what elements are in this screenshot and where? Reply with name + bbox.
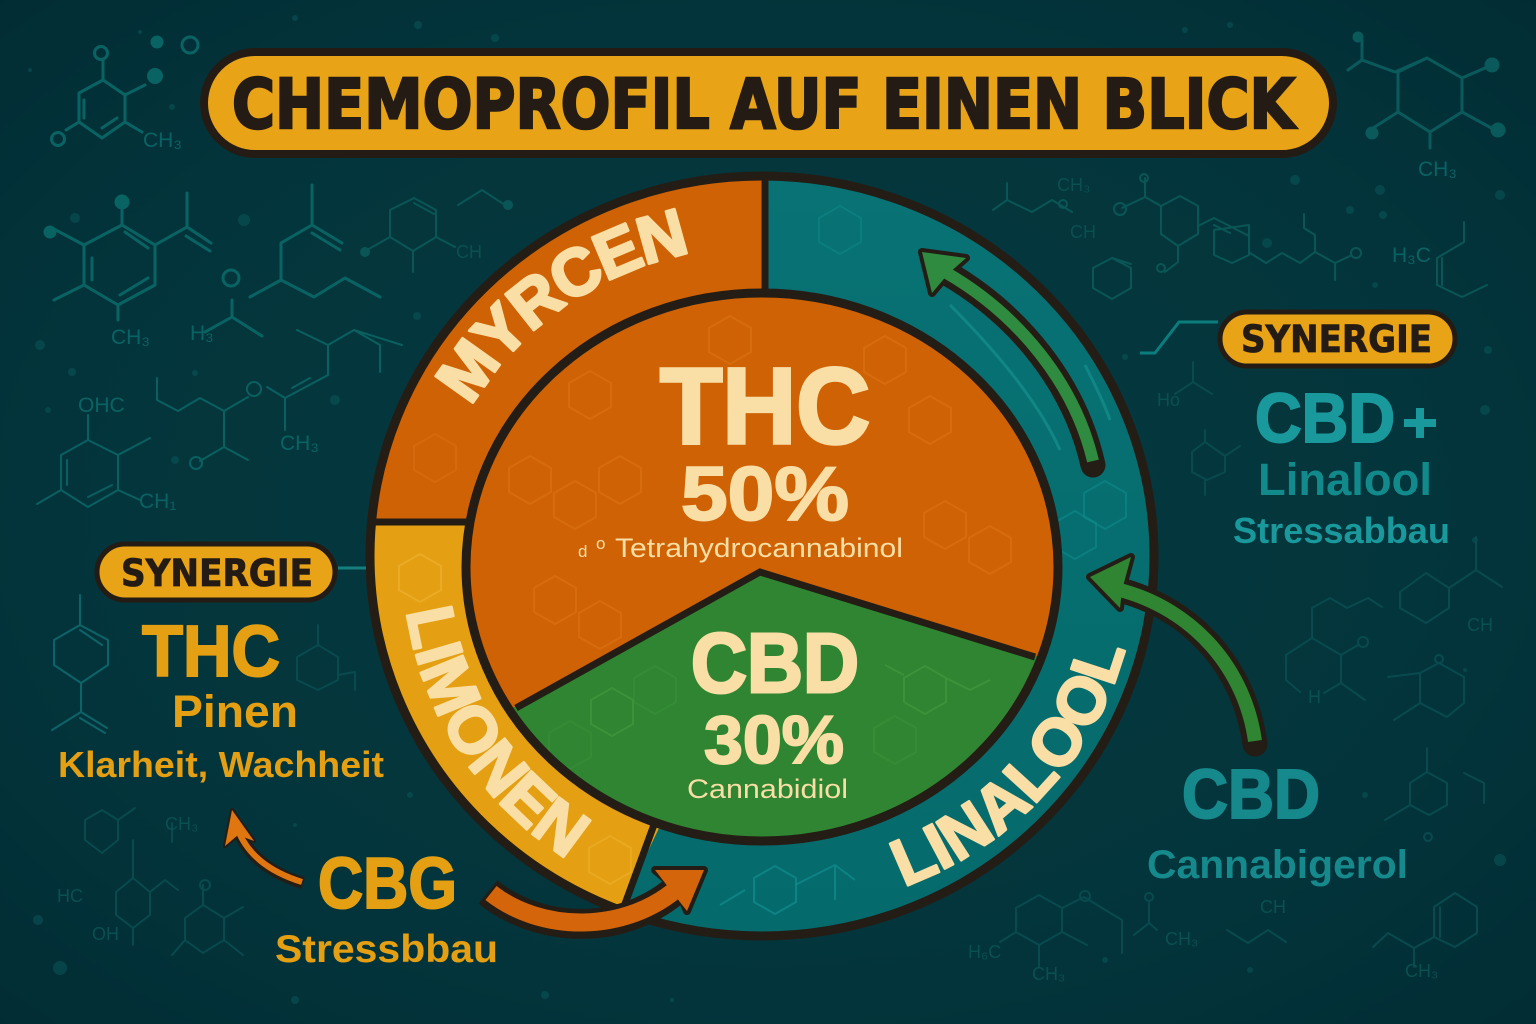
texture: THC molecules bbox=[509, 316, 1011, 649]
molecule: bottom cluster: CH₃ bbox=[1032, 964, 1065, 984]
CBD heading: CBD bbox=[1182, 755, 1320, 833]
molecule: large left ring bbox=[45, 193, 211, 349]
molecule: lower left ring bbox=[37, 394, 176, 513]
label: MYRCEN: MYRCEN bbox=[434, 208, 688, 404]
effect text: Klarheit, Wachheit bbox=[58, 744, 384, 785]
synergy pill bbox=[1220, 312, 1455, 366]
molecule: lower left faint cluster: HC bbox=[57, 886, 83, 906]
synergy label: SYNERGIE bbox=[121, 552, 313, 595]
molecule: lower left faint cluster: CH₃ bbox=[165, 814, 198, 834]
connector line bbox=[338, 566, 366, 570]
CBD plus heading: CBD bbox=[1255, 379, 1395, 457]
molecule: small ring bbox=[1093, 258, 1131, 299]
segment: Linalool teal bbox=[630, 180, 1150, 932]
molecule: right cluster bbox=[1286, 537, 1502, 841]
CBD label block bbox=[687, 616, 859, 804]
THC heading: THC bbox=[660, 345, 870, 466]
molecule: top right ring: CH₃ bbox=[1418, 158, 1457, 181]
arrow: green inside Linalool ring bbox=[922, 252, 1093, 465]
CBD name: Cannabidiol bbox=[687, 774, 848, 804]
molecule: chain near ring top: CH bbox=[1070, 222, 1096, 242]
plus sign bbox=[1404, 408, 1436, 438]
molecule: chain near ring top: CH₃ bbox=[1057, 175, 1090, 195]
molecule: branched chain: H₃ bbox=[190, 322, 214, 345]
molecule: ketone chain: CH₃ bbox=[280, 432, 319, 455]
segment: Myrcen orange bbox=[376, 180, 762, 518]
synergy label: SYNERGIE bbox=[1241, 318, 1432, 361]
CBD heading: CBD bbox=[691, 616, 859, 710]
concentric chart bbox=[366, 172, 1158, 940]
molecule: small faint ring bbox=[1192, 430, 1240, 495]
ring dividers bbox=[368, 172, 765, 912]
molecule: bottom cluster: CH₃ bbox=[1165, 929, 1198, 949]
outer ring outline bbox=[370, 176, 1154, 936]
background chemical structures right bbox=[968, 33, 1504, 984]
pie divider bbox=[516, 572, 1035, 708]
ring segments bbox=[374, 180, 1150, 932]
label: CBD Cannabigerol bbox=[1147, 755, 1408, 887]
callout: left synergy bbox=[58, 544, 384, 785]
molecule: upper centre ring bbox=[361, 190, 512, 272]
segment: Limonen amber bbox=[374, 526, 659, 904]
pie outline bbox=[466, 293, 1058, 841]
pie slice: THC bbox=[466, 293, 1058, 841]
molecule: bottom cluster: H₆C bbox=[968, 942, 1001, 962]
molecule: lower left faint cluster: OH bbox=[92, 924, 119, 944]
label: CBG bbox=[275, 844, 498, 971]
molecule: bottom cluster bbox=[968, 891, 1477, 984]
faint texture on ring bbox=[399, 206, 1126, 914]
CBD percent: 30% bbox=[704, 702, 844, 778]
Cannabigerol text: Cannabigerol bbox=[1147, 843, 1408, 887]
arrow: orange from CBG to THC synergy bbox=[225, 810, 303, 883]
inner pie bbox=[460, 293, 1070, 860]
background chemical structures left bbox=[37, 37, 512, 955]
title banner bbox=[204, 52, 1333, 154]
title pill bbox=[204, 52, 1333, 154]
synergy pill bbox=[97, 544, 335, 600]
molecule: H3C chain bbox=[1392, 222, 1487, 297]
molecule: top left ring: CH₃ bbox=[143, 129, 182, 152]
molecule: lower left ring: OHC bbox=[78, 394, 125, 417]
molecule: large left ring: CH₃ bbox=[111, 326, 150, 349]
molecule: top left ring bbox=[52, 37, 198, 152]
label: LINALOOL: LINALOOL bbox=[888, 648, 1126, 887]
callout: right synergy bbox=[1140, 312, 1455, 551]
molecule: lower left faint cluster bbox=[57, 808, 243, 955]
effect text: Stressabbau bbox=[1233, 510, 1450, 551]
connector line bbox=[1140, 322, 1218, 353]
THC heading: THC bbox=[142, 612, 280, 692]
molecule: right cluster: H bbox=[1308, 687, 1321, 707]
label: LIMONEN: LIMONEN bbox=[406, 606, 592, 858]
molecule: faint ring beside THC bbox=[297, 625, 355, 690]
arrow: green from CBD to ring bbox=[1090, 557, 1255, 744]
molecule: limonene left bbox=[52, 595, 108, 733]
CBG effect: Stressbbau bbox=[275, 928, 498, 971]
molecule: right cluster: CH bbox=[1467, 615, 1493, 635]
pie slice: CBD bbox=[513, 576, 1037, 836]
THC name: Tetrahydrocannabinol bbox=[615, 533, 903, 563]
molecule: upper centre ring: CH bbox=[456, 242, 482, 262]
molecule: HO fragment bbox=[1157, 362, 1212, 410]
THC name: o bbox=[596, 534, 605, 553]
THC label block bbox=[578, 345, 903, 563]
Linalool text: Linalool bbox=[1258, 454, 1432, 505]
molecule: top right ring bbox=[1348, 33, 1504, 181]
molecule: ketone chain bbox=[157, 330, 402, 469]
texture: CBD molecules bbox=[590, 664, 990, 737]
molecule: H3C chain: H₃C bbox=[1392, 244, 1431, 267]
molecule: bottom cluster: CH bbox=[1260, 897, 1286, 917]
molecule: lower left ring: CH₁ bbox=[139, 490, 176, 513]
molecule: bottom cluster: CH₃ bbox=[1405, 961, 1438, 981]
molecule: HO fragment: Ho bbox=[1157, 390, 1180, 410]
molecule: chain near ring top bbox=[993, 175, 1096, 242]
molecule: long chain cannabinoid bbox=[1114, 174, 1361, 280]
THC name: d bbox=[578, 542, 587, 561]
title text: CHEMOPROFIL AUF EINEN BLICK bbox=[232, 65, 1297, 145]
CBG heading: CBG bbox=[318, 844, 457, 924]
THC percent: 50% bbox=[681, 452, 849, 537]
molecule: branched chain bbox=[190, 185, 380, 345]
Pinen text: Pinen bbox=[172, 686, 298, 737]
arrow: orange from CBG to ring bbox=[488, 870, 704, 924]
